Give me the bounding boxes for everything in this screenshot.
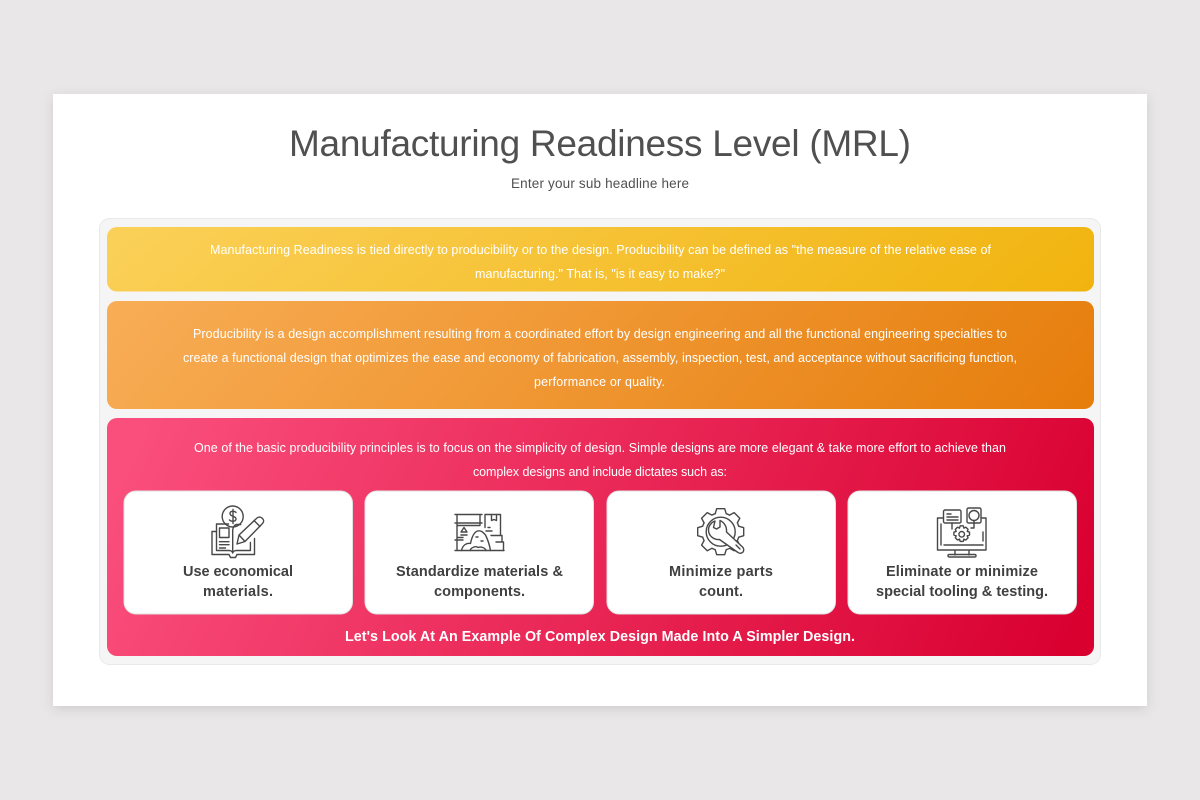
card: minimize parts [607, 491, 836, 614]
panel: red principles [107, 418, 1094, 656]
card: economical materials: materials. [203, 584, 273, 600]
title: Manufacturing Readiness Level (MRL) [289, 123, 911, 164]
card: special tooling [848, 491, 1076, 614]
card: minimize parts: count. [699, 584, 743, 600]
panel: orange explanation: Producibility is a design accomplishment resulting from a coordinated effort by design engineering and all the functional engineering specialties to [193, 327, 1007, 341]
card: economical materials: Use economical [183, 564, 293, 580]
sub headline: Enter your sub headline here [511, 176, 689, 191]
panel: orange explanation: create a functional design that optimizes the ease and economy of fabrication, assembly, inspection, test, and acceptance without sacrificing function, [183, 351, 1017, 365]
panel: yellow definition [107, 227, 1094, 292]
card: special tooling: Eliminate or minimize [886, 564, 1038, 580]
card: special tooling: special tooling & testing. [876, 584, 1048, 600]
panel: orange explanation: performance or quality. [534, 375, 665, 389]
icon: gear and wrench [698, 509, 744, 555]
icon: monitor, gear and notes [938, 508, 986, 557]
panel: yellow definition: manufacturing." That is, "is it easy to make?" [475, 267, 725, 281]
icon: barrel, sand pile and boxes [455, 514, 504, 550]
panel: red principles: complex designs and include dictates such as: [473, 465, 727, 479]
panel: container [100, 218, 1100, 664]
card: minimize parts: Minimize parts [669, 564, 773, 580]
slide panel [53, 94, 1147, 706]
closing statement: Let's Look At An Example Of Complex Design Made Into A Simpler Design. [345, 629, 855, 645]
card: standardize [365, 491, 594, 614]
panel: orange explanation [107, 301, 1094, 409]
card: standardize: Standardize materials & [396, 564, 564, 580]
panel: red principles: One of the basic producibility principles is to focus on the simplicity of design. Simple designs are more elegant & take more effort to achieve than [194, 441, 1006, 455]
card: economical materials [124, 491, 352, 614]
panel: yellow definition: Manufacturing Readiness is tied directly to producibility or to the design. Producibility can be defined as "the measure of the relative ease of [210, 243, 992, 257]
icon: book, coin and pencil [212, 506, 264, 558]
card: standardize: components. [434, 584, 525, 600]
